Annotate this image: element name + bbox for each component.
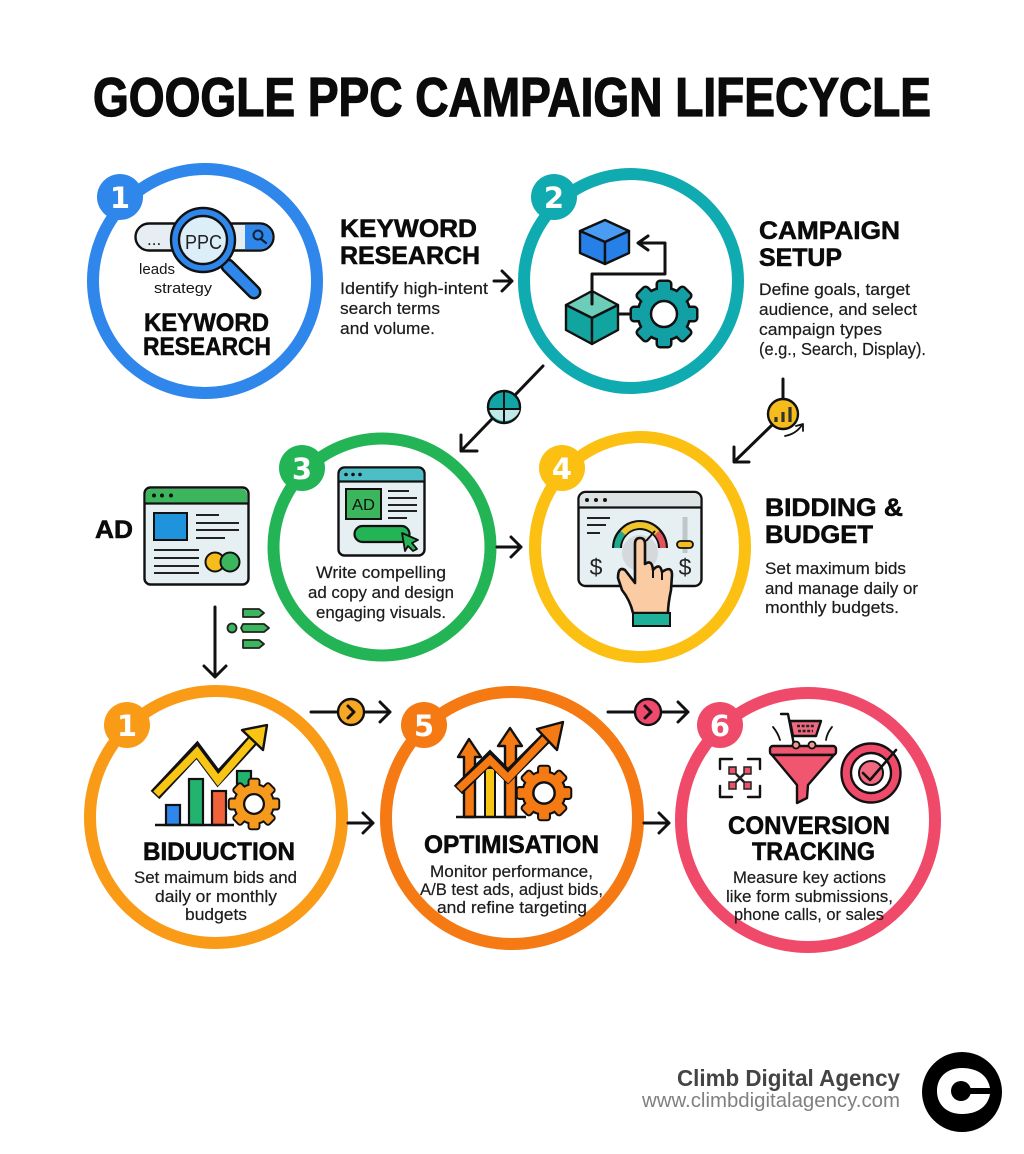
heading: optimisation: OPTIMISATION [424, 831, 599, 859]
icon: budget dashboard with hand [578, 492, 702, 626]
icon: bars, arrow and gear [155, 725, 278, 828]
arrow: step 3 to step 4 [497, 537, 521, 557]
panel: step 3 ad creation circle [274, 438, 490, 656]
heading: keyword research in circle: KEYWORD [144, 309, 269, 337]
icon: budget dashboard with hand: $ [590, 554, 603, 580]
icon: ad browser window [144, 488, 248, 584]
heading: conversion tracking [728, 812, 890, 866]
text block: conversion description: Measure key actions [733, 868, 886, 887]
icon: search bar with magnifier: PPC [185, 232, 222, 254]
arrow: step 2 to step 3 with teal node [461, 366, 543, 451]
badge: 3 [279, 445, 325, 491]
text block: biduuction description: budgets [185, 905, 247, 924]
panel: step 1 keyword research circle [93, 169, 317, 393]
arrow: middle red connector [644, 813, 669, 833]
footer: agency name and url [641, 1065, 900, 1112]
arrow: step 1 to step 2 [494, 271, 512, 291]
text block: bidding and budget: BUDGET [765, 521, 873, 549]
text block: conversion description: phone calls, or sales [734, 905, 884, 924]
text block: campaign setup: campaign types [759, 320, 882, 339]
badge: 1 [97, 174, 143, 220]
text block: bidding and budget: Set maximum bids [765, 559, 906, 578]
icon: agency logo [922, 1052, 1002, 1132]
badge: 6: 6 [710, 709, 730, 743]
text block: step 3 description: Write compelling [316, 563, 446, 582]
panel: step 4 bidding circle [535, 437, 745, 657]
badge: 2 [531, 174, 577, 220]
text block: keyword research: Identify high-intent [340, 279, 488, 298]
text block: conversion description [726, 868, 893, 924]
text block: keyword research: and volume. [340, 319, 435, 338]
text block: biduuction description [134, 868, 297, 924]
arrow: top orange connector [311, 699, 390, 725]
badge: 6 [697, 702, 743, 748]
text block: optimisation description: and refine targeting [437, 898, 587, 917]
text block: step 3 description: engaging visuals. [316, 603, 446, 622]
text block: campaign setup: audience, and select [759, 300, 917, 319]
arrow: ad down to bottom row [204, 607, 226, 677]
badge: 1: 1 [110, 181, 130, 215]
label: leads: leads [139, 261, 175, 278]
text block: campaign setup: Define goals, target [759, 280, 910, 299]
panel: step 2 campaign setup circle [524, 174, 738, 388]
text block: keyword research: RESEARCH [340, 242, 480, 270]
arrow: middle orange connector [348, 813, 373, 833]
badge: 1 orange: 1 [117, 709, 137, 743]
text block: step 3 description: ad copy and design [308, 583, 454, 602]
icon: ad window with button and cursor: AD [352, 497, 375, 514]
text block: campaign setup [759, 217, 926, 359]
icon: budget dashboard with hand: $ [679, 554, 692, 580]
badge: 5 [401, 702, 447, 748]
text block: bidding and budget: BIDDING & [765, 494, 903, 522]
footer: agency name and url: Climb Digital Agency [677, 1065, 900, 1091]
text block: campaign setup: SETUP [759, 244, 842, 272]
heading: conversion tracking: CONVERSION [728, 812, 890, 840]
icon: rising arrows and gear [456, 722, 570, 819]
icon: cubes, connector and gear [566, 220, 696, 346]
label: AD: AD [95, 516, 133, 544]
icon: scan frame [720, 759, 760, 797]
badge: 5: 5 [414, 709, 434, 743]
icon: target with check [842, 744, 900, 802]
label: strategy: strategy [154, 280, 213, 297]
text block: optimisation description [420, 862, 603, 917]
text block: campaign setup: (e.g., Search, Display). [759, 339, 926, 359]
arrow: top red connector [608, 699, 688, 725]
panel: step 5 optimisation circle [386, 692, 638, 944]
text block: step 3 description [308, 563, 454, 622]
heading: biduuction: BIDUUCTION [143, 838, 295, 866]
icon: ad window with button and cursor [338, 468, 424, 556]
text block: bidding and budget: and manage daily or [765, 579, 918, 598]
badge: 2: 2 [544, 181, 564, 215]
heading: keyword research in circle: RESEARCH [143, 333, 271, 361]
text block: keyword research: KEYWORD [340, 215, 477, 243]
text block: bidding and budget [765, 494, 918, 617]
text block: keyword research [340, 215, 488, 338]
text block: biduuction description: daily or monthly [155, 887, 277, 906]
icon: cart and funnel [770, 714, 836, 803]
heading: keyword research in circle [143, 309, 271, 361]
footer: agency name and url: www.climbdigitalagency.com [641, 1090, 900, 1112]
icon: search bar with magnifier [136, 208, 274, 292]
text block: optimisation description: A/B test ads, adjust bids, [420, 880, 603, 899]
panel: step 1 biduuction circle [90, 691, 342, 943]
arrow: campaign setup to step 4 with chart node [734, 379, 803, 462]
badge: 4: 4 [552, 452, 572, 486]
icon: search bar with magnifier: ... [147, 230, 161, 249]
icon: green tags [228, 609, 269, 648]
text block: conversion description: like form submissions, [726, 887, 893, 906]
text block: optimisation description: Monitor performance, [430, 862, 593, 881]
text block: biduuction description: Set maimum bids and [134, 868, 297, 887]
text block: bidding and budget: monthly budgets. [765, 598, 899, 617]
panel: step 6 conversion tracking circle [681, 693, 935, 947]
text block: keyword research: search terms [340, 299, 440, 318]
text block: campaign setup: CAMPAIGN [759, 217, 900, 245]
badge: 4 [539, 445, 585, 491]
heading: conversion tracking: TRACKING [752, 838, 875, 866]
badge: 1 orange [104, 702, 150, 748]
badge: 3: 3 [292, 452, 312, 486]
